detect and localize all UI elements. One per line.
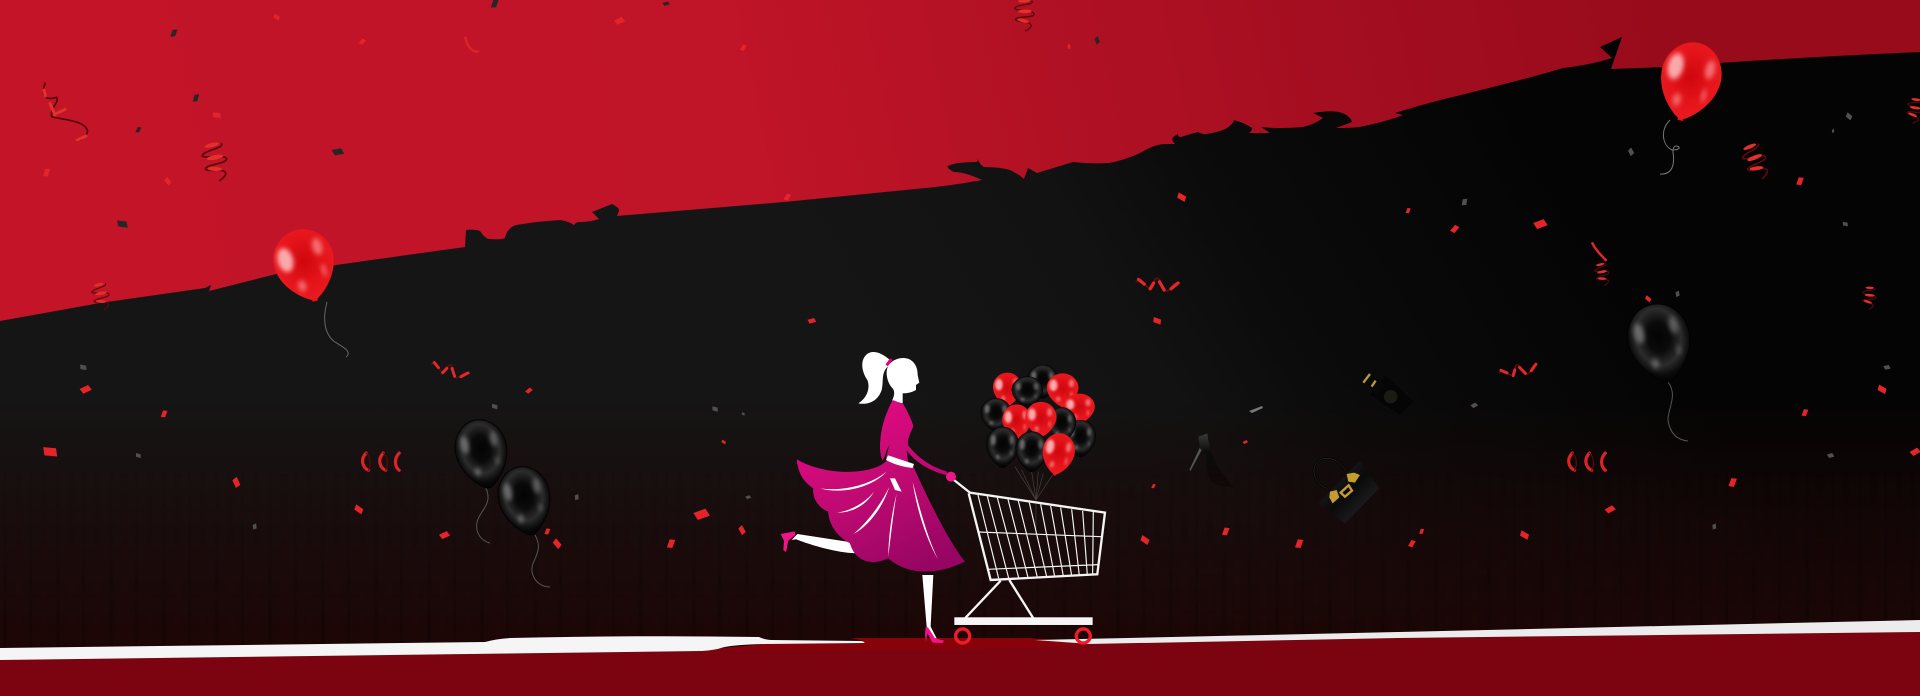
balloon: black left — [450, 415, 514, 543]
balloon: black right — [1620, 297, 1700, 441]
icon: handbag — [1314, 458, 1379, 523]
dress bodice and arms — [880, 400, 947, 475]
front leg — [922, 575, 937, 638]
background: lower red tint — [0, 400, 1920, 650]
balloon: black middle left — [493, 462, 557, 587]
back leg — [792, 534, 855, 553]
balloon: red upper right — [1651, 36, 1729, 174]
ribbon: large streamer top left — [44, 83, 87, 141]
head — [887, 358, 919, 403]
balloon: red left — [266, 222, 348, 357]
cart legs — [965, 580, 1033, 618]
belt — [886, 455, 914, 468]
front shoe — [925, 627, 944, 643]
balloon bouquet — [981, 365, 1096, 530]
balloons cluster — [981, 365, 1096, 478]
hand — [946, 472, 956, 482]
ponytail — [858, 352, 891, 404]
icon: perfume bottle — [1363, 373, 1413, 415]
floor: white paint stroke right — [1035, 620, 1920, 644]
floor: white paint stroke left — [0, 636, 865, 660]
icon: high heel shoe — [1189, 433, 1235, 488]
background: faint vertical streaks — [0, 470, 1920, 650]
confetti — [43, 0, 1920, 549]
skirt — [797, 459, 965, 572]
skirt folds — [820, 472, 938, 560]
floor: bright red patch — [720, 638, 1090, 650]
back shoe — [781, 531, 795, 552]
icon: lipstick sliver — [1249, 406, 1263, 413]
cart wheels — [956, 629, 1090, 643]
cart basket wires — [978, 495, 1101, 578]
cart base — [954, 617, 1093, 625]
shopping cart — [954, 480, 1105, 643]
woman figure — [781, 352, 965, 643]
balloon strings — [1015, 467, 1053, 530]
hair tie — [887, 359, 891, 365]
cart frame — [954, 480, 1105, 580]
floor: dark red band — [0, 630, 1920, 696]
